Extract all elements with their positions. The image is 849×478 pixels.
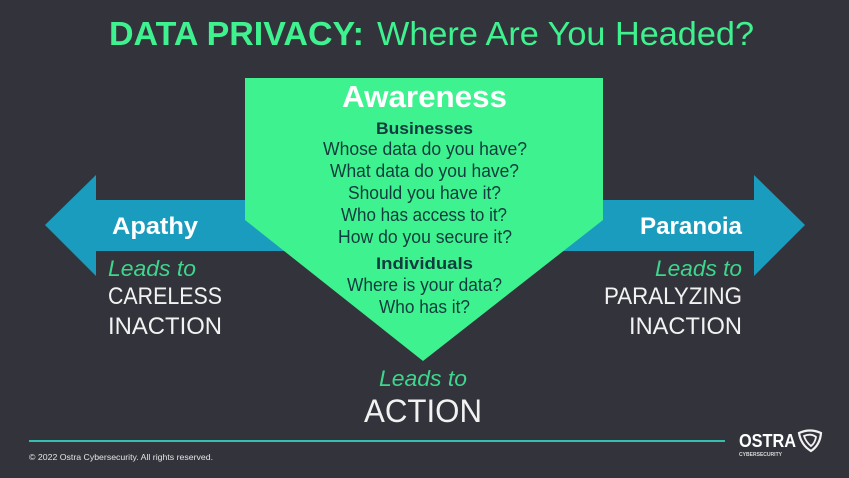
text block: businesses: [323, 119, 527, 247]
logo: ostra: [739, 430, 821, 458]
footer line: [29, 440, 725, 442]
logo: ostra: OSTRA: [739, 431, 796, 451]
text block: individuals: [347, 254, 502, 317]
arrow: paranoia: Paranoia: [640, 213, 743, 240]
arrow: apathy: Apathy: [112, 213, 199, 240]
title: [109, 15, 754, 52]
text block: action: Leads to: [379, 366, 467, 391]
text block: businesses: Whose data do you have?: [323, 139, 527, 159]
text block: careless inaction: CARELESS: [108, 283, 222, 310]
logo: ostra: CYBERSECURITY: [739, 452, 782, 458]
text block: individuals: Who has it?: [379, 297, 470, 317]
arrow: paranoia: [550, 175, 805, 276]
text block: paralyzing inaction: [604, 256, 742, 340]
text block: businesses: How do you secure it?: [338, 227, 512, 247]
text block: action: [364, 366, 482, 429]
text block: paralyzing inaction: Leads to: [655, 256, 742, 281]
text block: careless inaction: Leads to: [108, 256, 196, 281]
text block: paralyzing inaction: PARALYZING: [604, 283, 742, 310]
heading: awareness: Awareness: [342, 79, 507, 114]
arrow: apathy: [45, 175, 300, 276]
title: DATA PRIVACY:: [109, 15, 364, 52]
text block: businesses: What data do you have?: [330, 161, 519, 181]
text block: individuals: Individuals: [376, 254, 473, 273]
text block: paralyzing inaction: INACTION: [629, 313, 742, 340]
text block: careless inaction: INACTION: [108, 313, 222, 340]
copyright: © 2022 Ostra Cybersecurity. All rights reserved.: [29, 452, 213, 462]
title: Where Are You Headed?: [377, 15, 754, 52]
icon: shield: [799, 430, 821, 451]
text block: businesses: Businesses: [376, 119, 473, 138]
text block: careless inaction: [108, 256, 222, 340]
text block: businesses: Who has access to it?: [341, 205, 507, 225]
panel: awareness: [245, 78, 603, 361]
text block: action: ACTION: [364, 393, 482, 429]
text block: individuals: Where is your data?: [347, 275, 502, 295]
text block: businesses: Should you have it?: [348, 183, 501, 203]
